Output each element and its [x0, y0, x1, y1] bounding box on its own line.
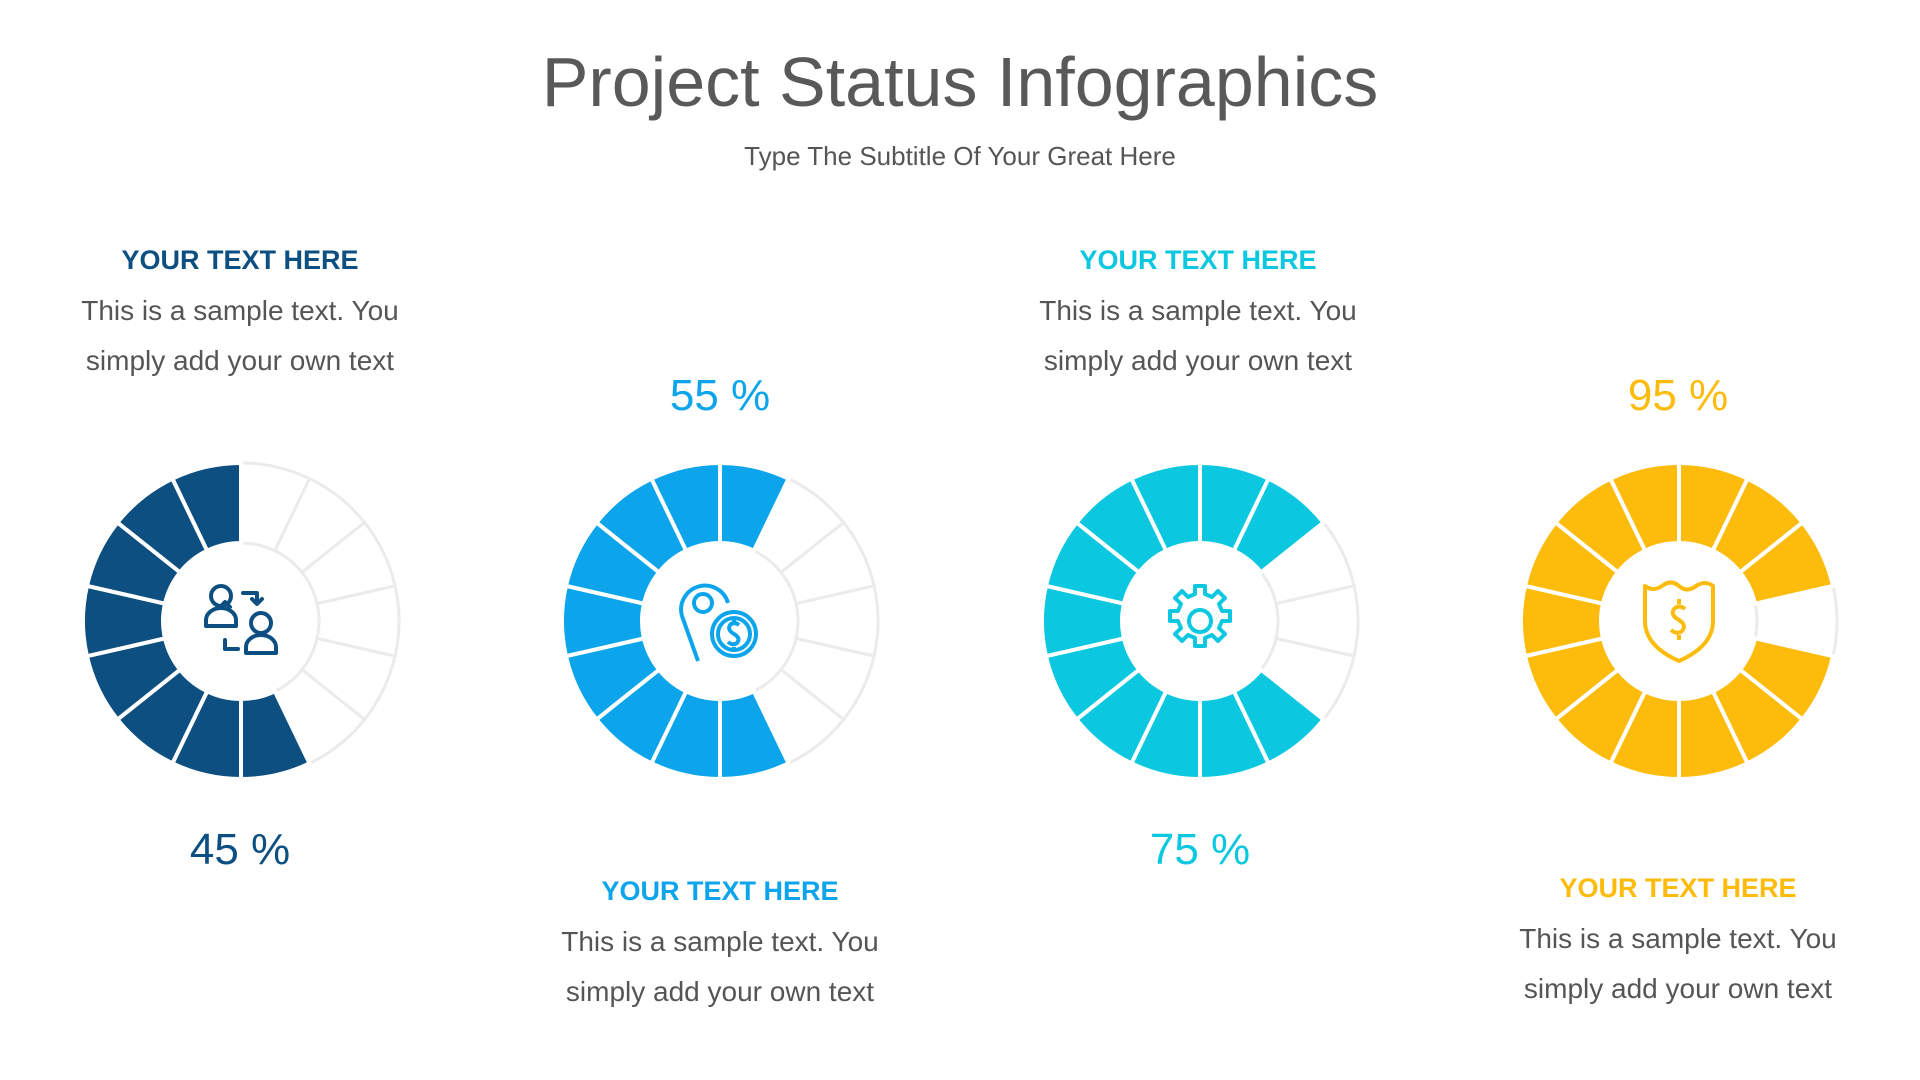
panel: item 4 text: [1519, 873, 1837, 1004]
panel: item 4 text: simply add your own text: [1524, 973, 1832, 1004]
panel: item 3 text: simply add your own text: [1044, 345, 1352, 376]
donut 1: 45%: [84, 462, 400, 777]
donut 2: 55%: [564, 465, 880, 777]
donut 3: 75%: [1044, 465, 1360, 777]
donut 4: 95%: [1522, 465, 1838, 777]
panel: item 3 text: This is a sample text. You: [1039, 295, 1357, 326]
percent 1: 45 %: [190, 825, 290, 874]
panel: item 2 text: simply add your own text: [566, 976, 874, 1007]
subtitle: Type The Subtitle Of Your Great Here: [744, 141, 1176, 171]
percent 4: 95 %: [1628, 371, 1728, 420]
panel: item 1 text: simply add your own text: [86, 345, 394, 376]
panel: item 3 text: YOUR TEXT HERE: [1079, 245, 1317, 275]
title: Project Status Infographics: [542, 43, 1378, 121]
panel: item 4 text: YOUR TEXT HERE: [1559, 873, 1797, 903]
panel: item 3 text: [1039, 245, 1357, 376]
panel: item 4 text: This is a sample text. You: [1519, 923, 1837, 954]
panel: item 1 text: YOUR TEXT HERE: [121, 245, 359, 275]
panel: item 2 text: YOUR TEXT HERE: [601, 876, 839, 906]
percent 2: 55 %: [670, 371, 770, 420]
percent 3: 75 %: [1150, 825, 1250, 874]
panel: item 1 text: This is a sample text. You: [81, 295, 399, 326]
panel: item 2 text: [561, 876, 879, 1007]
panel: item 2 text: This is a sample text. You: [561, 926, 879, 957]
panel: item 1 text: [81, 245, 399, 376]
